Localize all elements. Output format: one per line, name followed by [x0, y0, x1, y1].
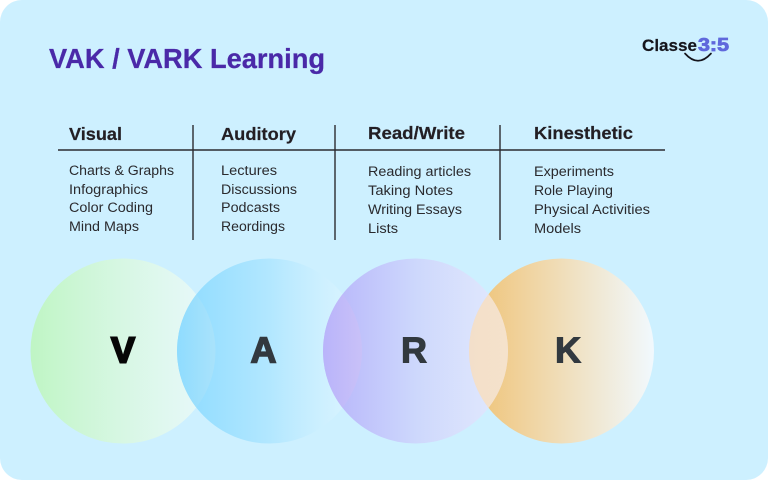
column: Read/Write: Read/Write	[368, 123, 465, 143]
column: Read/Write: Lists	[368, 221, 398, 237]
column: Visual	[69, 124, 174, 235]
logo: Classe 365: Classe	[642, 36, 697, 55]
column: Kinesthetic: Role Playing	[534, 183, 613, 199]
circle R	[323, 258, 508, 444]
column: Kinesthetic: Kinesthetic	[534, 123, 633, 143]
column: Kinesthetic: Physical Activities	[534, 202, 650, 218]
column: Read/Write: Reading articles	[368, 164, 471, 180]
circle A	[177, 258, 362, 444]
letter V: V	[111, 330, 135, 370]
column: Auditory: Reordings	[221, 219, 285, 235]
logo: Classe 365: 3:5	[698, 35, 729, 55]
column: Auditory: Podcasts	[221, 200, 280, 216]
column: Auditory: Discussions	[221, 182, 297, 198]
overlap R and K	[469, 294, 508, 408]
column: Visual: Charts & Graphs	[69, 163, 174, 179]
column: Visual: Visual	[69, 124, 122, 144]
column: Kinesthetic	[534, 123, 650, 237]
column: Read/Write: Taking Notes	[368, 183, 453, 199]
column: Visual: Mind Maps	[69, 219, 139, 235]
circle K	[469, 258, 654, 444]
column: Read/Write: Writing Essays	[368, 202, 462, 218]
column: Auditory: Auditory	[221, 124, 296, 144]
letter A: A	[250, 330, 276, 370]
column: Auditory	[221, 124, 297, 235]
column: Auditory: Lectures	[221, 163, 277, 179]
circle diagram: VARK	[30, 258, 654, 444]
column: Kinesthetic: Experiments	[534, 164, 614, 180]
circle V	[30, 258, 216, 444]
logo: Classe 365	[642, 35, 729, 61]
title: VAK / VARK Learning	[49, 43, 325, 74]
column: Kinesthetic: Models	[534, 221, 581, 237]
letter K: K	[555, 330, 581, 370]
table: learning styles	[58, 123, 665, 240]
overlap V and A	[177, 295, 216, 407]
column: Read/Write	[368, 123, 471, 237]
letter R: R	[401, 330, 427, 370]
column: Visual: Color Coding	[69, 200, 153, 216]
overlap A and R	[323, 294, 342, 408]
table rule lines	[58, 125, 665, 240]
column: Visual: Infographics	[69, 182, 148, 198]
